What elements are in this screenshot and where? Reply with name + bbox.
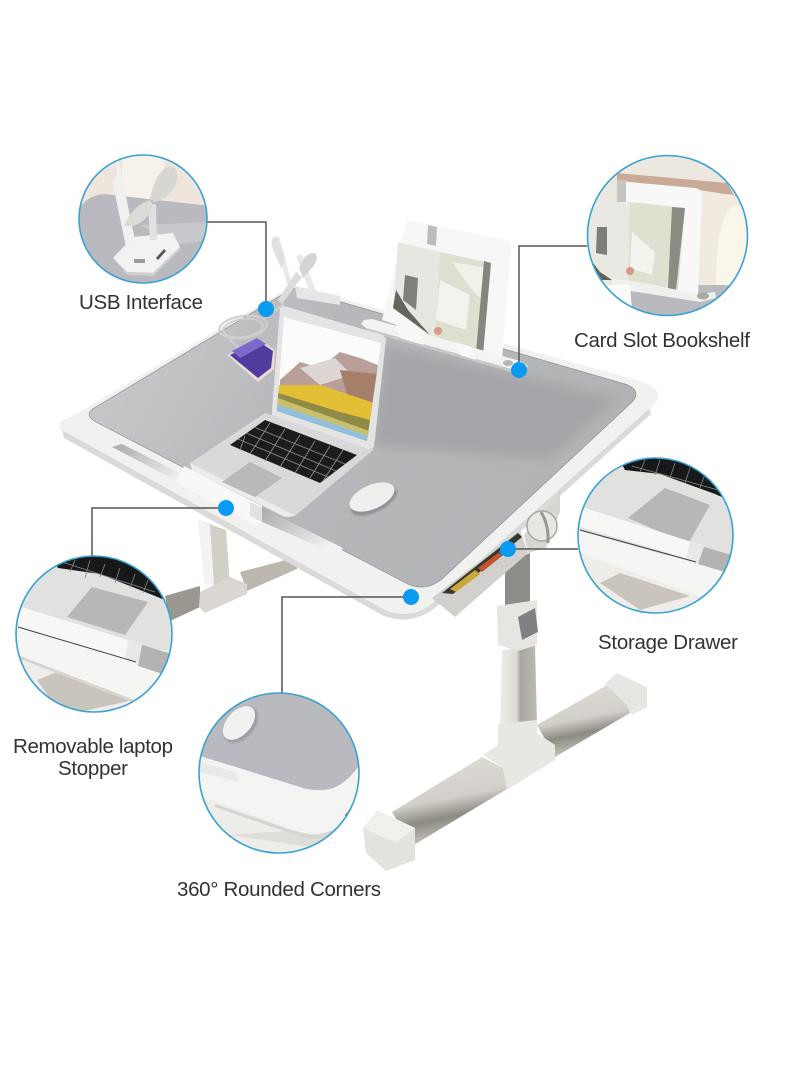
- book: [618, 202, 630, 280]
- panel: card slot bookshelf detail: [587, 155, 749, 320]
- rail: [612, 278, 716, 302]
- fan blades: [150, 166, 177, 202]
- card slot rail: [361, 319, 528, 372]
- frame: [197, 760, 362, 834]
- right table leg and foot: [363, 553, 647, 871]
- callout dot: corner: [403, 589, 419, 605]
- mouse: [345, 476, 401, 522]
- foot cap right: [605, 673, 647, 715]
- slot: [698, 547, 730, 572]
- panel: removable laptop stopper detail: [15, 556, 175, 720]
- callout dot: drawer: [500, 541, 516, 557]
- table top: [59, 285, 658, 620]
- panel: USB interface detail: [78, 154, 210, 290]
- table frame strip: [16, 626, 160, 700]
- board: [626, 182, 702, 294]
- drawer: [432, 530, 528, 617]
- fan stems: [112, 161, 134, 245]
- stand board: [382, 220, 511, 360]
- foot bar: right: [537, 685, 630, 757]
- lower post: [500, 646, 537, 725]
- upper post: [505, 553, 530, 612]
- laptop stopper: [176, 466, 262, 526]
- label: Removable laptop Stopper: Removable laptop: [13, 735, 173, 758]
- mat: [197, 692, 362, 790]
- book spine: [476, 261, 491, 355]
- slot left: [112, 444, 194, 488]
- foot cap left: [363, 810, 415, 871]
- label: Removable laptop Stopper: Stopper: [58, 757, 128, 780]
- book stand: [361, 220, 528, 375]
- label: Card Slot Bookshelf: Card Slot Bookshelf: [574, 329, 750, 352]
- screen bezel: [272, 306, 386, 449]
- panel: rounded corners detail: [197, 692, 362, 856]
- USB hub base: [113, 233, 180, 273]
- label: Removable laptop Stopper: [13, 735, 173, 780]
- trackpad: [222, 462, 282, 497]
- phone: [227, 338, 275, 382]
- callout dot: stopper: [218, 500, 234, 516]
- stopper bar: [580, 507, 702, 561]
- floor: [22, 650, 170, 711]
- laptop base: [190, 413, 373, 517]
- table frame strip: [579, 530, 723, 596]
- keyboard: [230, 420, 357, 483]
- foot bar: left: [392, 757, 507, 846]
- USB fan accessory: [271, 236, 340, 305]
- panel: storage drawer detail: [577, 457, 735, 615]
- callout dot: USB: [258, 301, 274, 317]
- mouse: [224, 707, 258, 744]
- stopper bar: [18, 607, 130, 657]
- table frame: [59, 285, 658, 614]
- USB cable: [218, 304, 284, 350]
- laptop: [190, 306, 390, 517]
- screen display: [277, 317, 381, 441]
- label: 360 Rounded Corners: 360° Rounded Corners: [177, 878, 381, 901]
- height collar: [497, 600, 537, 651]
- book pages: [393, 242, 440, 340]
- slot: [200, 762, 238, 782]
- callout dot: card slot: [511, 362, 527, 378]
- dark corner: [345, 810, 349, 816]
- keyboard keys: [50, 556, 165, 600]
- latch: [518, 608, 538, 640]
- floor: [582, 555, 710, 612]
- trackpad: [628, 488, 710, 544]
- slot: [138, 645, 169, 674]
- grey mat: [89, 288, 636, 587]
- laptop shadow on mat: [372, 345, 620, 460]
- keyboard keys: [622, 458, 722, 498]
- label: Storage Drawer: Storage Drawer: [598, 631, 738, 654]
- adjust knob: [524, 491, 560, 553]
- leader lines: [92, 222, 587, 693]
- label: USB Interface: USB Interface: [79, 291, 203, 314]
- T joint: [483, 720, 555, 790]
- trackpad: [67, 587, 148, 635]
- left table leg: [165, 520, 297, 621]
- slot right: [260, 507, 343, 555]
